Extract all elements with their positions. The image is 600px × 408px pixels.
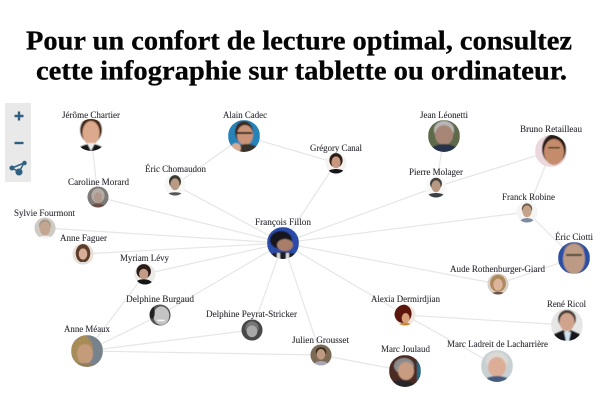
icon: network reset: [10, 162, 26, 175]
node: Anne Faguer: [60, 234, 107, 264]
node: Alexia Dermirdjian: Alexia Dermirdjian: [371, 295, 440, 305]
node: René Ricol: [547, 300, 586, 341]
node: Éric Ciotti: Éric Ciotti: [555, 231, 593, 243]
node: Delphine Peyrat-Stricker: Delphine Peyrat-Stricker: [206, 310, 298, 320]
title: cette infographie sur tablette ou ordinateur.: [36, 56, 567, 86]
node: Marc Ladreit de Lacharrière: Marc Ladreit de Lacharrière: [447, 340, 548, 350]
node: Delphine Burgaud: [126, 295, 194, 326]
node: Sylvie Fourmont: [14, 210, 75, 238]
node: François Fillon: [255, 218, 311, 259]
node: René Ricol: René Ricol: [547, 300, 586, 310]
node: François Fillon: François Fillon: [255, 218, 311, 228]
node: Delphine Peyrat-Stricker: [206, 310, 298, 341]
node: Sylvie Fourmont: Sylvie Fourmont: [14, 209, 75, 219]
node: Franck Robine: Franck Robine: [502, 193, 555, 203]
node: Marc Joulaud: Marc Joulaud: [381, 345, 430, 355]
node: Franck Robine: [502, 194, 555, 222]
title: [26, 26, 572, 86]
node: Grégory Canal: Grégory Canal: [310, 144, 362, 154]
node: Jean Léonetti: [420, 112, 468, 152]
node: Myriam Lévy: Myriam Lévy: [120, 254, 169, 264]
zoom toolbar: [5, 103, 31, 182]
network links: [45, 135, 574, 371]
node: Anne Faguer: Anne Faguer: [60, 234, 108, 244]
node: Aude Rothenburger-Giard: Aude Rothenburger-Giard: [450, 265, 545, 275]
node: Grégory Canal: [310, 144, 362, 174]
node: Jean Léonetti: Jean Léonetti: [420, 111, 468, 121]
node: Alain Cadec: Alain Cadec: [223, 111, 267, 121]
title: Pour un confort de lecture optimal, consultez: [26, 26, 572, 56]
node: Myriam Lévy: [120, 254, 169, 284]
node: Alexia Dermirdjian: [371, 296, 440, 326]
node: Bruno Retailleau: Bruno Retailleau: [520, 125, 582, 135]
node: Éric Chomaudon: Éric Chomaudon: [145, 163, 206, 175]
node: Pierre Molager: Pierre Molager: [409, 168, 464, 178]
node: Caroline Morard: Caroline Morard: [68, 178, 129, 188]
node: Anne Méaux: Anne Méaux: [64, 325, 110, 335]
node: Aude Rothenburger-Giard: [450, 266, 545, 294]
node: Anne Méaux: [64, 326, 110, 367]
node: Jérôme Chartier: Jérôme Chartier: [62, 111, 121, 121]
icon: zoom out: [14, 142, 24, 144]
node: Julien Grousset: Julien Grousset: [292, 336, 349, 346]
node: Pierre Molager: [409, 168, 463, 198]
node: Bruno Retailleau: [520, 125, 582, 167]
node: Marc Joulaud: [381, 346, 430, 387]
node: Alain Cadec: [223, 112, 267, 152]
node: Éric Ciotti: [555, 231, 593, 274]
node: Delphine Burgaud: Delphine Burgaud: [126, 295, 194, 305]
node: Jérôme Chartier: [62, 112, 120, 151]
node: Éric Chomaudon: [145, 164, 206, 196]
node: Caroline Morard: [68, 178, 129, 208]
icon: zoom in: [14, 112, 24, 120]
node: Marc Ladreit de Lacharrière: [447, 340, 548, 382]
node: Julien Grousset: [292, 336, 350, 366]
